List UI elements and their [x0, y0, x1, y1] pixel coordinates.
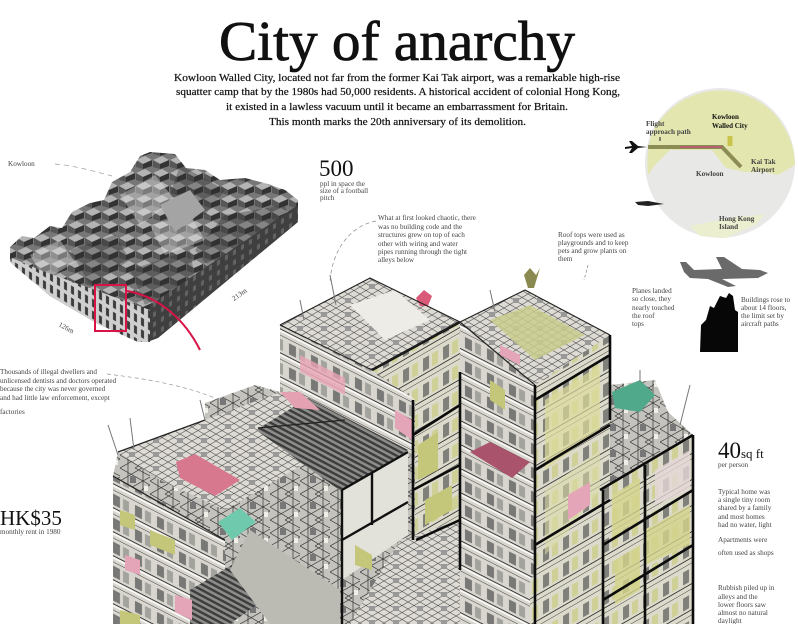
right note one: shared by a family [718, 504, 772, 512]
map label: airport [751, 158, 776, 174]
3D model of walled city [10, 152, 298, 350]
stat: 500 [319, 156, 368, 202]
right tower face [530, 435, 693, 624]
tower B yellow shade [545, 365, 600, 470]
callout: rooftops: What at first looked chaotic, there [378, 214, 476, 222]
plane note: the roof [632, 312, 655, 320]
plane note [632, 287, 675, 328]
right note one: a single tiny room [718, 496, 771, 504]
right note two: lower floors saw [718, 601, 767, 609]
callout: roof gardens: pets and grow plants on [558, 247, 627, 255]
map label: airport: Kai Tak [751, 158, 776, 166]
callout: rooftops: structures grew on top of each [378, 231, 465, 239]
right note one: and most homes [718, 513, 765, 521]
teal rooftop structure [612, 380, 655, 412]
teal awning [218, 508, 256, 540]
centre alley shade [350, 520, 460, 624]
shed wall below [342, 452, 408, 580]
tower B lower shade [545, 450, 600, 555]
callout: rooftops: pipes running through the tight [378, 248, 467, 256]
model dimension: width: 126m [57, 321, 76, 336]
model dimension: depth: 213m [231, 286, 249, 303]
tower A roof [280, 278, 460, 370]
stat: 500: size of a football [320, 187, 368, 195]
right note two: almost no natural [718, 609, 768, 617]
stat: rent: HK$35 [0, 506, 62, 530]
icon: ship [635, 201, 664, 206]
right note two [718, 584, 775, 624]
right note one [718, 488, 774, 557]
upper-left block roof [118, 392, 345, 510]
stat: 500: 500 [319, 156, 354, 181]
intro text: Kowloon Walled City, located not far from the former Kai Tak airport, was a remarkable high-rise [174, 73, 621, 84]
skyline note: aircraft paths [741, 320, 779, 328]
corrugated shed roof [256, 398, 408, 492]
callout: rooftops: alleys below [378, 256, 415, 264]
tower B roof [460, 290, 610, 385]
selection box [95, 285, 126, 331]
skyline note: Buildings rose to [741, 296, 791, 304]
callout: left note: Thousands of illegal dwellers and [0, 368, 97, 376]
pink umbrella [416, 290, 432, 306]
map label: walled city: Kowloon [712, 113, 739, 121]
map label: flight path [646, 120, 691, 141]
callout: left note [0, 368, 215, 416]
callout: rooftops: was no building code and the [378, 223, 462, 231]
upper-left block wall [113, 476, 225, 624]
callout: roof gardens: Roof tops were used as [558, 231, 625, 239]
model light patches [30, 175, 205, 280]
callout: left note: and had little law enforcement, except [0, 394, 110, 402]
intro text [174, 73, 621, 128]
callout: roof gardens: playgrounds and to keep [558, 239, 629, 247]
building silhouette [113, 278, 693, 624]
plane note: Planes landed [632, 287, 672, 295]
upper pink roof [280, 392, 320, 410]
icon: jet plane [680, 257, 768, 287]
map land: Hong Kong Island [690, 214, 765, 238]
callout: left note: unlicensed dentists and doctors operated [0, 377, 117, 385]
lower striped roof [190, 560, 285, 624]
right note one: often used as shops [718, 549, 774, 557]
stat: 40 sq ft: per person [718, 461, 749, 469]
callout: roof gardens: them [558, 255, 573, 263]
plane note: so close, they [632, 295, 671, 303]
tower A front wall [280, 325, 415, 460]
right note two: Rubbish piled up in [718, 584, 775, 592]
intro text: it existed in a lawless vacuum until it became an embarrassment for Britain. [226, 102, 568, 113]
icon: black skyline silhouette [700, 293, 738, 352]
callout: left note: because the city was never governed [0, 385, 106, 393]
map label: Hong Kong Island: Hong Kong [719, 215, 755, 223]
intro text: This month marks the 20th anniversary of its demolition. [269, 117, 526, 128]
tower B right wall [535, 335, 610, 624]
right tower yellow cells [612, 450, 690, 605]
model label and leader: Kowloon [8, 160, 35, 168]
skyline note [741, 296, 791, 328]
rooftop plant [524, 268, 540, 288]
stat: 500: ppl in space the [320, 180, 365, 188]
shed window grid [342, 452, 408, 624]
model central courtyard [160, 190, 205, 232]
callout: left note: factories [0, 408, 25, 416]
lower walkway [230, 530, 340, 624]
stat: 500: pitch [320, 194, 335, 202]
icon: small plane on approach [625, 141, 647, 153]
map label: airport: Airport [751, 166, 775, 174]
intro text: squatter camp that by the 1980s had 50,000 residents. A historical accident of colonial Hong Kong, [176, 87, 620, 98]
map label: Hong Kong Island: Island [719, 223, 738, 231]
model right face [150, 205, 298, 341]
tower B left wall [460, 322, 535, 624]
map label: flight path: Flight [646, 120, 665, 128]
tower A right wall [372, 322, 460, 540]
isometric illustration of buildings [108, 268, 693, 624]
stat: rent: monthly rent in 1980 [0, 528, 61, 536]
right note one: Typical home was [718, 488, 770, 496]
model silhouette roofs [10, 152, 298, 342]
map label: Kowloon: Kowloon [696, 170, 724, 178]
map label: walled city line two: Walled City [712, 122, 748, 130]
selection pointer curve [127, 291, 200, 350]
model shade patches [70, 165, 290, 305]
roof edge linework [113, 278, 610, 540]
tower A roof clearing [350, 290, 430, 340]
skyline note: the limit set by [741, 312, 784, 320]
right note one: had no water, light [718, 521, 772, 529]
plane note: tops [632, 320, 644, 328]
right note two: alleys and the [718, 593, 758, 601]
right note one: Apartments were [718, 536, 767, 544]
callout: roof gardens [558, 231, 629, 280]
model front face [12, 258, 150, 342]
map label: Hong Kong Island [719, 215, 755, 231]
map label: flight path: approach path [646, 128, 691, 136]
pink awning [176, 454, 240, 496]
yellow wall patches [120, 380, 505, 624]
rooftop antennas [108, 275, 690, 455]
tower A pink wall [300, 355, 345, 395]
pink wall patches [125, 345, 590, 620]
tower B roof garden [490, 305, 585, 360]
stat: 40 sq ft: 40sq ft [718, 438, 764, 463]
black structural frames [372, 322, 693, 624]
map land: Kowloon peninsula [648, 91, 795, 175]
model label and leader [8, 160, 112, 176]
callout: rooftops: other with wiring and water [378, 240, 458, 248]
red awning [470, 442, 530, 478]
runway and approach path [648, 136, 741, 167]
locator map [645, 88, 795, 238]
skyline note: about 14 floors, [741, 304, 787, 312]
title: City of anarchy [219, 11, 575, 73]
plane note: nearly touched [632, 304, 675, 312]
callout: rooftops [330, 214, 476, 282]
